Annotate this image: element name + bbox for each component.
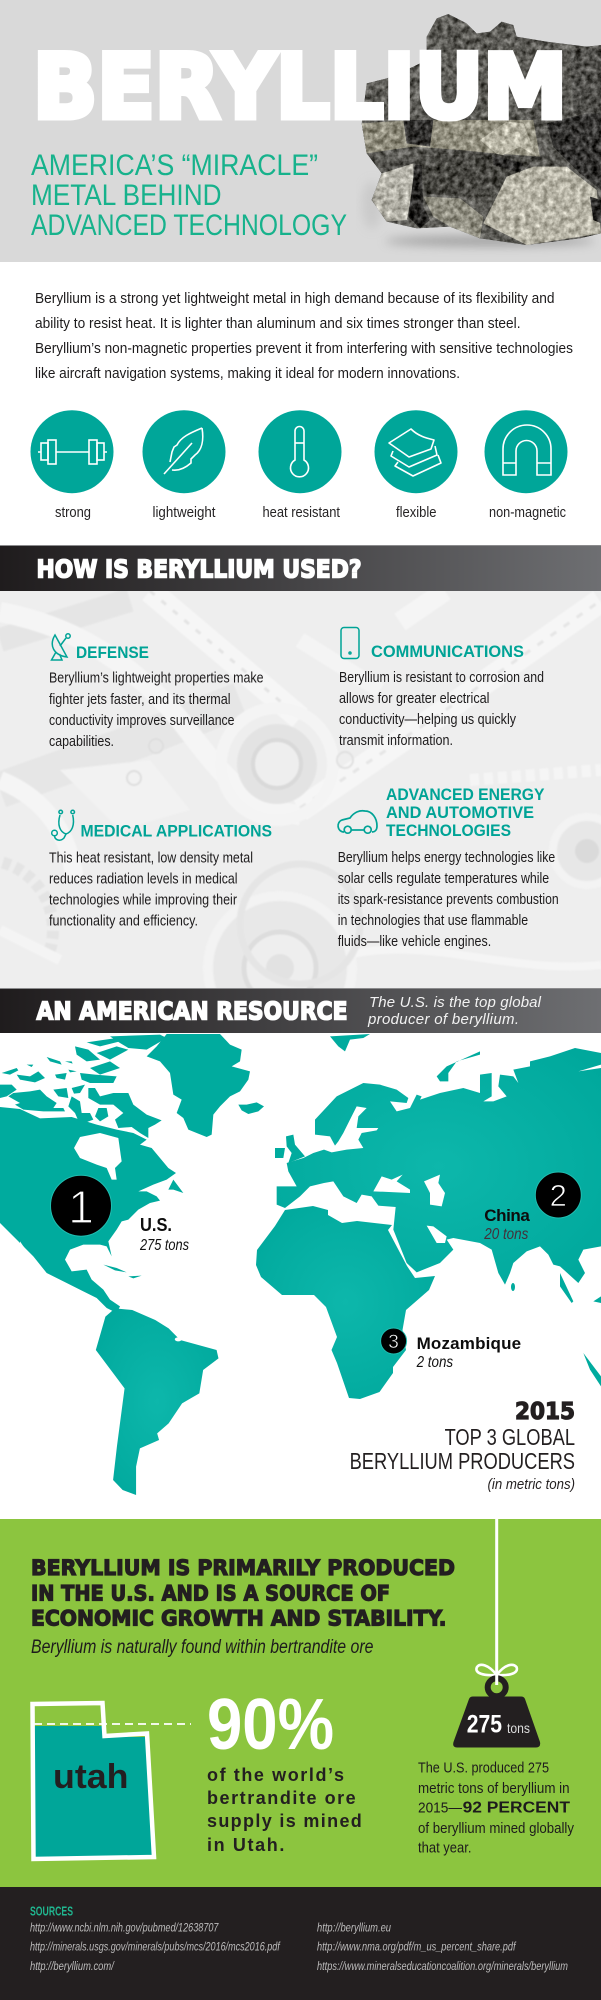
block: communications: allows for greater electrical — [339, 690, 490, 707]
block: advanced energy and automotive: AND AUTOMOTIVE — [386, 804, 534, 822]
sources list: http://beryllium.com/ — [30, 1961, 115, 1973]
weight paragraph — [418, 1760, 574, 1857]
weight paragraph: The U.S. produced 275 — [418, 1760, 549, 1777]
intro text: like aircraft navigation systems, making it ideal for modern innovations. — [35, 365, 460, 382]
block: advanced energy and automotive: TECHNOLOGIES — [386, 822, 511, 840]
headline: IN THE U.S. AND IS A SOURCE OF — [31, 1582, 390, 1606]
world map — [0, 1034, 601, 1495]
statistic: 90 percent: supply is mined — [207, 1811, 362, 1831]
block: defense: DEFENSE — [76, 644, 149, 662]
weight paragraph: of beryllium mined globally — [418, 1820, 574, 1837]
map caption — [350, 1399, 575, 1493]
block: advanced energy and automotive: in technologies that use flammable — [338, 912, 528, 929]
headline — [31, 1556, 455, 1630]
icon labels — [55, 505, 566, 521]
panel: sources footer — [0, 1887, 601, 2000]
block: medical applications: MEDICAL APPLICATIONS — [80, 823, 272, 841]
weight paragraph: 92 PERCENT — [463, 1800, 570, 1817]
icon: lightweight feather — [142, 410, 226, 493]
panel: header — [0, 0, 601, 262]
statistic: 90 percent — [207, 1685, 362, 1855]
subtitle — [31, 149, 347, 242]
image: beryllium rock — [362, 14, 601, 246]
section bar: an american resource: producer of beryllium. — [367, 1011, 519, 1028]
block: advanced energy and automotive — [338, 786, 559, 950]
block: defense: Beryllium’s lightweight properties make — [49, 670, 264, 687]
marker 2: china — [483, 1172, 581, 1243]
title: BERYLLIUM — [33, 36, 567, 138]
icon: satellite dish — [52, 634, 70, 660]
block: communications: COMMUNICATIONS — [371, 643, 524, 661]
eurasia — [275, 1034, 601, 1386]
marker 1: u.s.: U.S. — [140, 1215, 172, 1235]
icon: stethoscope — [52, 810, 74, 840]
section bar: how is beryllium used: HOW IS BERYLLIUM USED? — [36, 554, 362, 584]
south america — [96, 1308, 218, 1495]
icon labels: heat resistant — [262, 505, 340, 521]
sources list: http://www.nma.org/pdf/m_us_percent_share.pdf — [317, 1942, 517, 1954]
utah shape: utah — [53, 1758, 128, 1796]
weight paragraph: that year. — [418, 1840, 472, 1857]
statistic: 90 percent: in Utah. — [207, 1835, 284, 1855]
marker 2: china: 20 tons — [483, 1226, 528, 1243]
block: advanced energy and automotive: ADVANCED ENERGY — [386, 786, 544, 804]
icon: strong — [30, 410, 114, 493]
icon: hanging weight: tons — [507, 1720, 530, 1736]
icon labels: non-magnetic — [489, 505, 566, 521]
block: communications — [339, 628, 544, 749]
block: medical applications: This heat resistant, low density metal — [49, 850, 253, 867]
block: advanced energy and automotive: Beryllium helps energy technologies like — [338, 849, 555, 866]
panel: sources footer: SOURCES — [30, 1905, 73, 1919]
africa — [256, 1206, 435, 1399]
icon: non-magnetic magnet — [484, 410, 568, 493]
intro text — [35, 290, 573, 382]
marker 1: u.s.: 1 — [68, 1181, 94, 1233]
sources list — [30, 1923, 568, 1973]
block: communications: Beryllium is resistant to corrosion and — [339, 669, 544, 686]
icon: hanging weight — [453, 1519, 540, 1748]
intro text: Beryllium is a strong yet lightweight metal in high demand because of its flexibility and — [35, 290, 554, 307]
map caption: (in metric tons) — [488, 1476, 575, 1493]
subtitle: METAL BEHIND — [31, 179, 222, 212]
block: medical applications: functionality and efficiency. — [49, 913, 198, 930]
statistic: 90 percent: bertrandite ore — [207, 1788, 356, 1808]
block: defense: conductivity improves surveillance — [49, 712, 234, 729]
sources list: http://beryllium.eu — [317, 1923, 391, 1935]
marker 2: china: China — [484, 1206, 530, 1225]
icon: flexible layers — [374, 410, 458, 493]
north america and greenland — [0, 1034, 264, 1313]
block: medical applications — [49, 810, 272, 930]
block: advanced energy and automotive: fluids—like vehicle engines. — [338, 933, 491, 950]
subheading: Beryllium is naturally found within bertrandite ore — [31, 1636, 374, 1658]
marker 2: china: 2 — [550, 1178, 567, 1213]
statistic: 90 percent: of the world’s — [207, 1765, 344, 1785]
section bar: how is beryllium used — [0, 545, 601, 591]
headline: BERYLLIUM IS PRIMARILY PRODUCED — [31, 1556, 455, 1580]
icon: smartphone — [341, 628, 359, 658]
section bar: an american resource: The U.S. is the top global — [369, 994, 542, 1011]
weight paragraph: metric tons of beryllium in — [418, 1780, 570, 1797]
block: defense: capabilities. — [49, 733, 114, 750]
section bar: an american resource — [0, 988, 601, 1033]
panel: uses with engine background — [0, 591, 601, 988]
marker 1: u.s. — [50, 1175, 189, 1254]
utah shape — [32, 1703, 191, 1860]
panel: properties icons — [30, 410, 568, 521]
icon: car — [338, 811, 377, 833]
panel: production in utah — [0, 1519, 601, 1887]
sources list: http://minerals.usgs.gov/minerals/pubs/mcs/2016/mcs2016.pdf — [30, 1942, 281, 1954]
marker 1: u.s.: 275 tons — [139, 1237, 189, 1254]
icon: hanging weight: 275 — [467, 1711, 502, 1739]
block: medical applications: technologies while improving their — [49, 892, 237, 909]
subtitle: ADVANCED TECHNOLOGY — [31, 209, 347, 242]
marker 3: mozambique: 3 — [388, 1332, 399, 1353]
map caption: 2015 — [515, 1399, 575, 1425]
statistic: 90 percent: 90% — [207, 1685, 334, 1765]
section bar: an american resource: AN AMERICAN RESOURCE — [36, 996, 348, 1026]
block: communications: conductivity—helping us quickly — [339, 711, 516, 728]
icon labels: flexible — [396, 505, 436, 521]
intro text: ability to resist heat. It is lighter than aluminum and six times stronger than steel. — [35, 315, 520, 332]
sources list: http://www.ncbi.nlm.nih.gov/pubmed/12638707 — [30, 1923, 219, 1935]
block: communications: transmit information. — [339, 732, 453, 749]
block: medical applications: reduces radiation levels in medical — [49, 871, 238, 888]
image: engine gears background — [0, 591, 601, 988]
headline: ECONOMIC GROWTH AND STABILITY. — [31, 1606, 446, 1630]
block: advanced energy and automotive: solar cells regulate temperatures while — [338, 870, 549, 887]
block: defense — [49, 634, 264, 750]
marker 3: mozambique: Mozambique — [417, 1334, 521, 1353]
subtitle: AMERICA’S “MIRACLE” — [31, 149, 318, 182]
marker 3: mozambique — [381, 1328, 521, 1371]
marker 3: mozambique: 2 tons — [416, 1354, 453, 1371]
weight paragraph: 2015— — [418, 1800, 462, 1817]
icon: heat resistant thermometer — [258, 410, 342, 493]
icon labels: lightweight — [152, 505, 216, 521]
block: defense: fighter jets faster, and its thermal — [49, 691, 230, 708]
icon labels: strong — [55, 505, 91, 521]
